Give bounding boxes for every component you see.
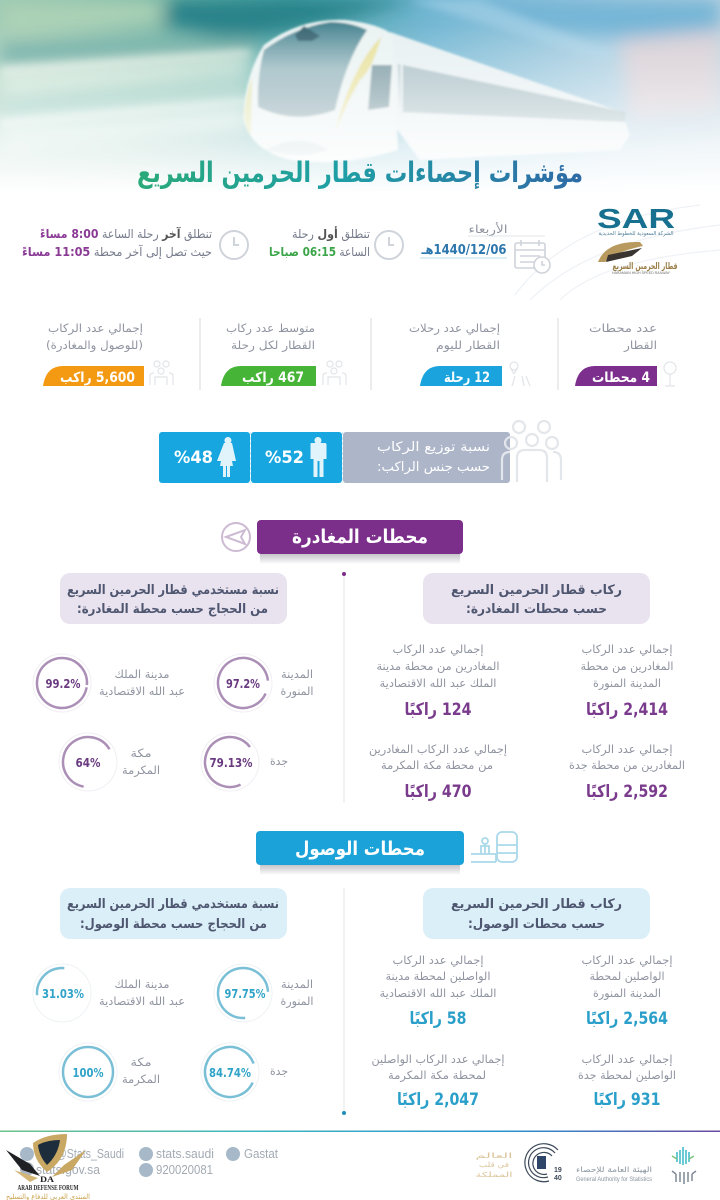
ring: Madinah departures 97.2%: 97.2% [226, 677, 260, 691]
divider lines [200, 318, 558, 390]
stat: KAEC arrivals: الواصلين لمحطة مدينة [386, 969, 490, 984]
ring: KAEC departures 99.2%: عبد الله الاقتصادية [99, 684, 185, 698]
icon: train and passenger [471, 832, 517, 862]
icon: people [323, 361, 346, 385]
stat: Jeddah departures [569, 742, 685, 802]
footer logo: kingdom at heart of the world [476, 1152, 513, 1179]
stat: trips: القطار لليوم [436, 338, 500, 353]
ring: Jeddah arrivals 84.74%: 84.74% [209, 1066, 251, 1080]
stat: average riders: متوسط عدد ركاب [226, 321, 315, 336]
stat: Madinah arrivals: الواصلين لمحطة [590, 969, 664, 984]
icon: woman [217, 437, 236, 477]
footer logo: General Authority for Statistics: General Authority for Statistics [576, 1176, 653, 1183]
date block: 1440/12/06هـ [421, 243, 506, 258]
footer: social handles: stats.gov.sa [36, 1162, 101, 1177]
background line art behind logos [515, 205, 720, 300]
gender distribution bar: حسب جنس الراكب: [377, 460, 490, 475]
last trip block: حيث تصل إلى آخر محطة 11:05 مساءً [22, 244, 212, 260]
watermark: Arab Defense Forum: ARAB DEFENSE FORUM [18, 1184, 79, 1192]
stat: KAEC departures: الملك عبد الله الاقتصادية [380, 676, 496, 690]
stat: Jeddah arrivals: إجمالي عدد الركاب [582, 1052, 672, 1067]
ring: Makkah arrivals 100%: 100% [72, 1066, 104, 1080]
footer logo: kingdom at heart of the world: المملكة [476, 1171, 513, 1179]
icon: station sign [664, 362, 676, 386]
stat: Madinah arrivals [582, 953, 672, 1029]
stat: total riders: (للوصول والمغادرة) [46, 338, 143, 353]
stat: Makkah arrivals: إجمالي عدد الركاب الواصلين [372, 1052, 504, 1067]
footer logo: 1940: 40 [554, 1175, 562, 1182]
ring: Makkah departures 64%: 64% [76, 756, 100, 770]
ring: Jeddah departures 79.13%: 79.13% [210, 756, 252, 770]
stat: KAEC arrivals [380, 953, 496, 1029]
stat: KAEC departures: 124 راكبًا [404, 700, 472, 720]
last trip block [22, 226, 248, 260]
ring: Madinah arrivals 97.75%: المنورة [280, 994, 314, 1009]
stat: KAEC departures [376, 642, 500, 720]
stat: Makkah departures: إجمالي عدد الركاب المغادرين [369, 742, 507, 757]
stat: Makkah departures: 470 راكبًا [404, 782, 472, 802]
logo: Haramain high speed railway: قطار الحرمين السريع [612, 262, 678, 272]
stat: stations: القطار [623, 338, 657, 353]
ring: KAEC arrivals 31.03%: عبد الله الاقتصادية [99, 994, 185, 1008]
gender distribution bar: %52 [265, 448, 304, 468]
footer logo: General Authority for Statistics: الهيئة العامة للإحصاء [576, 1165, 652, 1174]
vertical divider: arrivals [342, 888, 346, 1115]
train body [243, 20, 630, 162]
section heading: arrivals: محطات الوصول [295, 838, 425, 860]
gender distribution bar: نسبة توزيع الركاب [377, 440, 490, 455]
ring: KAEC departures 99.2%: مدينة الملك [114, 667, 170, 681]
stat: KAEC arrivals: إجمالي عدد الركاب [392, 953, 484, 968]
stat: trips: إجمالي عدد رحلات [409, 321, 500, 336]
ring: Madinah arrivals 97.75%: المدينة [281, 977, 313, 991]
ring: Madinah arrivals 97.75% [214, 964, 314, 1022]
ring: Madinah departures 97.2%: المنورة [280, 684, 314, 699]
stat: Jeddah departures: 2,592 راكبًا [586, 782, 668, 802]
stat: average riders [221, 321, 346, 386]
stat: Jeddah departures: إجمالي عدد الركاب [582, 742, 672, 757]
stat: average riders: القطار لكل رحلة [231, 338, 315, 353]
title: مؤشرات إحصاءات قطار الحرمين السريع [137, 156, 583, 190]
stat: Jeddah arrivals: الواصلين لمحطة جدة [578, 1068, 676, 1083]
stat: Madinah departures: المغادرين من محطة [580, 659, 674, 674]
stat: stations [575, 321, 676, 386]
footer: social handles [20, 1146, 278, 1177]
footer rule [0, 1130, 720, 1132]
panel: riders by arrival station: حسب محطات الوصول: [468, 917, 605, 932]
panel: pilgrim share by departure station: من الحجاج حسب محطة المغادرة: [77, 602, 268, 617]
icon: clock [220, 231, 248, 259]
ring: Makkah departures 64% [59, 733, 160, 791]
footer logo: kingdom at heart of the world: العالم [476, 1152, 513, 1160]
footer: social handles: @Stats_Saudi [56, 1146, 124, 1161]
footer logo: kingdom at heart of the world: في قلب [479, 1161, 509, 1169]
section heading: arrivals [256, 831, 517, 875]
panel: riders by departure station: ركاب قطار الحرمين السريع [451, 583, 622, 598]
gender distribution bar: %48 [174, 448, 213, 468]
footer logo: General Authority for Statistics [576, 1147, 696, 1184]
stat: Madinah departures: 2,414 راكبًا [586, 700, 668, 720]
ring: Jeddah departures 79.13%: جدة [270, 754, 288, 768]
panel: pilgrim share by arrival station: نسبة مستخدمي قطار الحرمين السريع [67, 897, 279, 912]
watermark: Arab Defense Forum [6, 1134, 90, 1200]
stat: Madinah departures: إجمالي عدد الركاب [582, 642, 672, 657]
icon: clock [375, 231, 403, 259]
ring: KAEC arrivals 31.03% [33, 964, 185, 1022]
stat: stations: عدد محطات [589, 321, 657, 335]
watermark: Arab Defense Forum: DA [40, 1175, 54, 1184]
stat: Madinah departures [580, 642, 674, 720]
stat: KAEC departures: المغادرين من محطة مدينة [376, 659, 500, 674]
footer: social handles: Gastat [244, 1146, 278, 1161]
icon: people [150, 361, 173, 385]
ring: Makkah departures 64%: مكة [130, 746, 152, 760]
first trip block: الساعة 06:15 صباحا [269, 245, 370, 259]
ring: Makkah departures 64%: المكرمة [122, 763, 160, 778]
stat: total riders: 5,600 راكب [60, 370, 135, 386]
stat: Madinah arrivals: إجمالي عدد الركاب [582, 953, 672, 968]
footer logo: 1940: 19 [554, 1167, 562, 1174]
logo: Haramain high speed railway [598, 242, 678, 275]
ring: Makkah arrivals 100%: المكرمة [122, 1072, 160, 1087]
ring: Makkah arrivals 100%: مكة [130, 1055, 152, 1069]
panel: pilgrim share by arrival station [60, 888, 287, 939]
first trip block [269, 226, 403, 259]
panel: riders by departure station [423, 573, 650, 624]
stat: KAEC arrivals: الملك عبد الله الاقتصادية [380, 986, 496, 1000]
last trip block: تنطلق آخر رحلة الساعة 8:00 مساءً [40, 226, 212, 242]
header photo: train [0, 0, 720, 215]
section heading: departures [222, 520, 463, 564]
stat: Jeddah arrivals: 931 راكبًا [594, 1090, 660, 1110]
stat: Makkah arrivals [372, 1052, 504, 1110]
stat: Makkah arrivals: لمحطة مكة المكرمة [388, 1068, 486, 1083]
ring: KAEC departures 99.2% [33, 654, 185, 712]
first trip block: تنطلق أول رحلة [292, 226, 370, 242]
stat: trips [409, 321, 530, 386]
ring: Madinah departures 97.2% [210, 650, 314, 716]
stat: Makkah departures [369, 742, 507, 802]
vertical divider: departures [342, 572, 346, 803]
stat: Makkah departures: من محطة مكة المكرمة [381, 758, 493, 773]
stat: Jeddah departures: المغادرين من محطة جدة [569, 758, 685, 773]
logo: Haramain high speed railway: HARAMAIN HIGH SPEED RAILWAY [612, 271, 671, 275]
stat: trips: 12 رحلة [444, 370, 490, 386]
logo: SAR: الشركة السعودية للخطوط الحديدية [598, 230, 674, 237]
stat: Makkah arrivals: 2,047 راكبًا [397, 1090, 479, 1110]
icon: man [310, 437, 326, 477]
icon: direction arrow [222, 523, 250, 551]
stat: Jeddah arrivals [578, 1052, 676, 1110]
ring: Jeddah arrivals 84.74% [197, 1039, 288, 1105]
ring: KAEC arrivals 31.03%: مدينة الملك [114, 977, 170, 991]
icon: calendar [515, 240, 550, 273]
panel: pilgrim share by departure station: نسبة مستخدمي قطار الحرمين السريع [67, 583, 279, 598]
stat: total riders [43, 321, 173, 386]
panel: riders by arrival station: ركاب قطار الحرمين السريع [451, 897, 622, 912]
panel: pilgrim share by departure station [60, 573, 287, 624]
icon: people group [502, 421, 561, 482]
ring: KAEC departures 99.2%: 99.2% [46, 677, 80, 691]
date block: الأربعاء [468, 222, 508, 237]
stat: total riders: إجمالي عدد الركاب [48, 321, 143, 336]
footer: social handles: 920020081 [156, 1162, 213, 1177]
date block [420, 222, 550, 273]
panel: pilgrim share by arrival station: من الحجاج حسب محطة الوصول: [80, 917, 267, 932]
stat: average riders: 467 راكب [242, 370, 304, 386]
panel: riders by arrival station [423, 888, 650, 939]
icon: route pin [510, 362, 530, 386]
ring: Jeddah departures 79.13% [197, 729, 288, 795]
stat: KAEC departures: إجمالي عدد الركاب [392, 642, 484, 657]
stat: Madinah arrivals: المدينة المنورة [593, 986, 661, 1001]
ring: Jeddah arrivals 84.74%: جدة [270, 1064, 288, 1078]
stat: Madinah arrivals: 2,564 راكبًا [586, 1009, 668, 1029]
logo: SAR: SAR [597, 203, 675, 234]
ring: Makkah arrivals 100% [59, 1043, 160, 1101]
footer: social handles: stats.saudi [156, 1146, 214, 1161]
stat: KAEC arrivals: 58 راكبًا [410, 1009, 466, 1029]
ring: Madinah arrivals 97.75%: 97.75% [224, 987, 266, 1001]
ring: Madinah departures 97.2%: المدينة [281, 667, 313, 681]
panel: riders by departure station: حسب محطات المغادرة: [466, 602, 607, 617]
gender distribution bar [159, 421, 561, 483]
logo: SAR [597, 203, 675, 237]
stat: stations: 4 محطات [592, 370, 650, 386]
footer logo: 1940 [525, 1144, 562, 1182]
stat: Madinah departures: المدينة المنورة [593, 676, 661, 691]
section heading: departures: محطات المغادرة [292, 526, 428, 548]
ring: KAEC arrivals 31.03%: 31.03% [42, 987, 84, 1001]
